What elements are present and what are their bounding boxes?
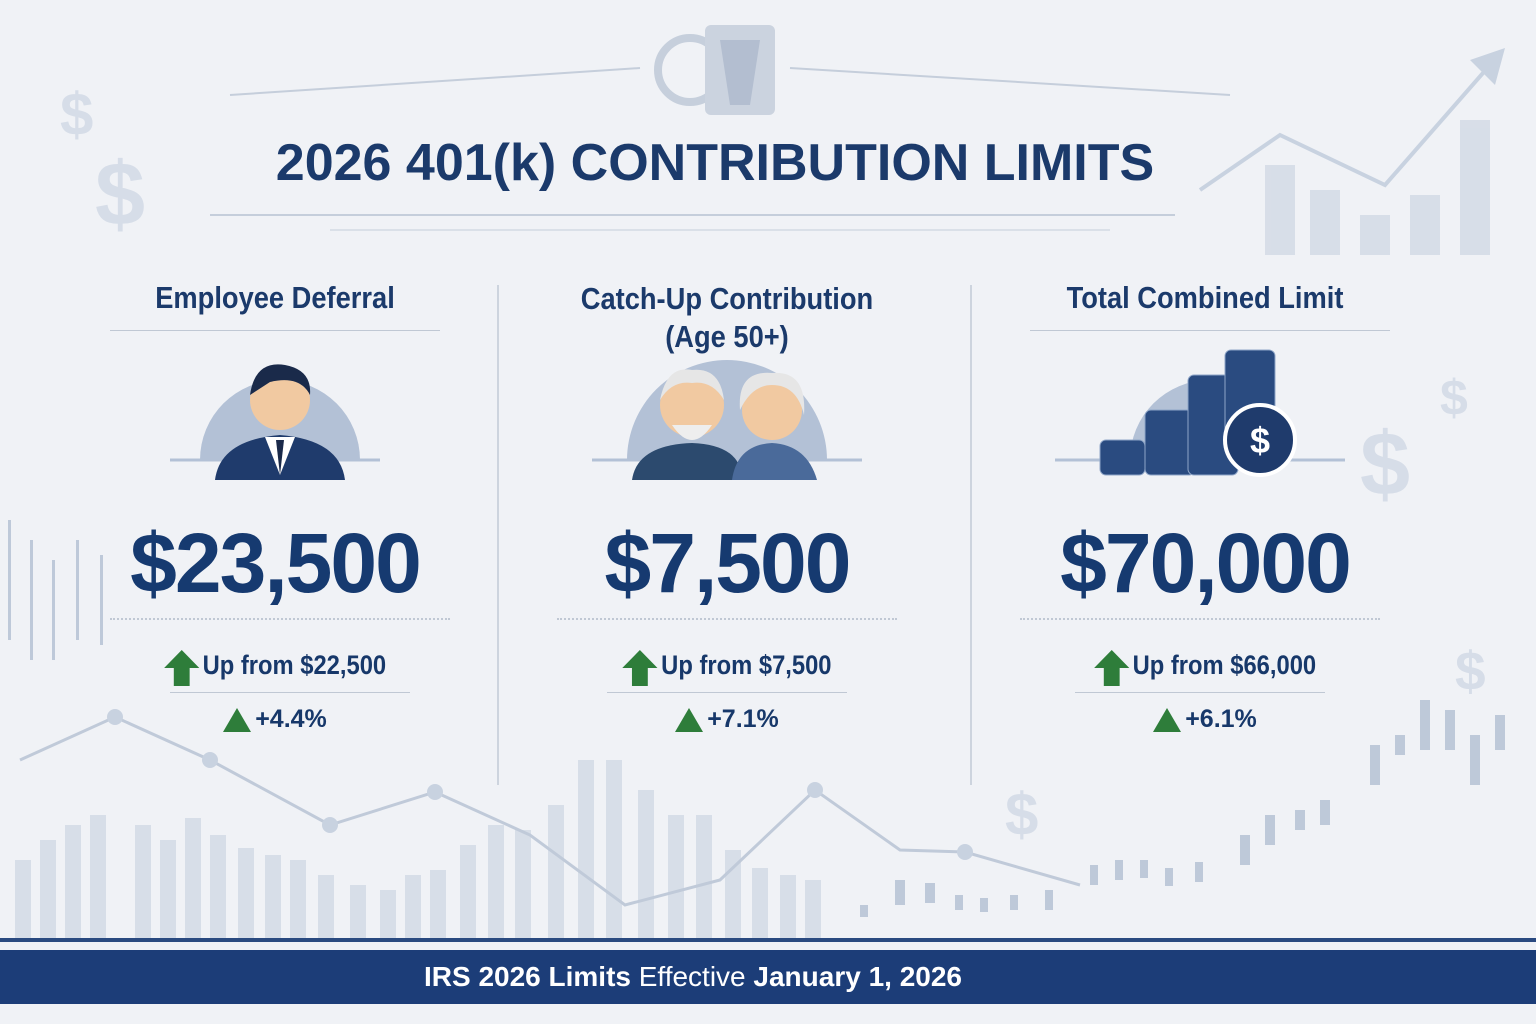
heading: Employee Deferral	[155, 280, 395, 315]
up from: Up from $66,000	[1133, 650, 1316, 680]
background charts: $	[1440, 370, 1468, 426]
up from: Up from $22,500	[203, 650, 386, 680]
up from	[1094, 650, 1316, 686]
icon: businessman	[170, 364, 380, 480]
percent: +7.1%	[707, 705, 779, 733]
percent	[223, 705, 327, 733]
up from	[164, 650, 386, 686]
icon: coins: $	[1250, 420, 1270, 461]
background charts: $	[1005, 781, 1038, 848]
heading: Catch-Up Contribution	[581, 281, 873, 316]
big number: $7,500	[605, 516, 849, 610]
heading: Total Combined Limit	[1067, 280, 1343, 315]
percent	[675, 705, 779, 733]
big number: $23,500	[130, 516, 420, 610]
panel: catch-up	[557, 281, 897, 733]
percent: +6.1%	[1185, 705, 1257, 733]
heading	[581, 281, 873, 354]
percent	[1153, 705, 1257, 733]
panel: total combined	[1020, 280, 1390, 733]
column dividers	[497, 285, 499, 785]
percent: +4.4%	[255, 705, 327, 733]
background charts: $	[60, 81, 93, 148]
panel: employee deferral	[110, 280, 450, 733]
background charts: $	[1360, 415, 1410, 515]
up from	[622, 650, 832, 686]
title: 2026 401(k) CONTRIBUTION LIMITS	[276, 134, 1154, 192]
footer band	[0, 938, 1536, 942]
background charts: $	[1455, 640, 1486, 702]
up from: Up from $7,500	[661, 650, 832, 680]
background charts: $	[95, 145, 145, 245]
icon: IRS emblem	[654, 25, 775, 115]
icon: seniors	[592, 360, 862, 480]
heading: (Age 50+)	[665, 319, 789, 354]
big number: $70,000	[1060, 516, 1350, 610]
text: IRS 2026 Limits Effective January 1, 2026	[424, 961, 962, 992]
icon: coins	[1055, 350, 1345, 477]
